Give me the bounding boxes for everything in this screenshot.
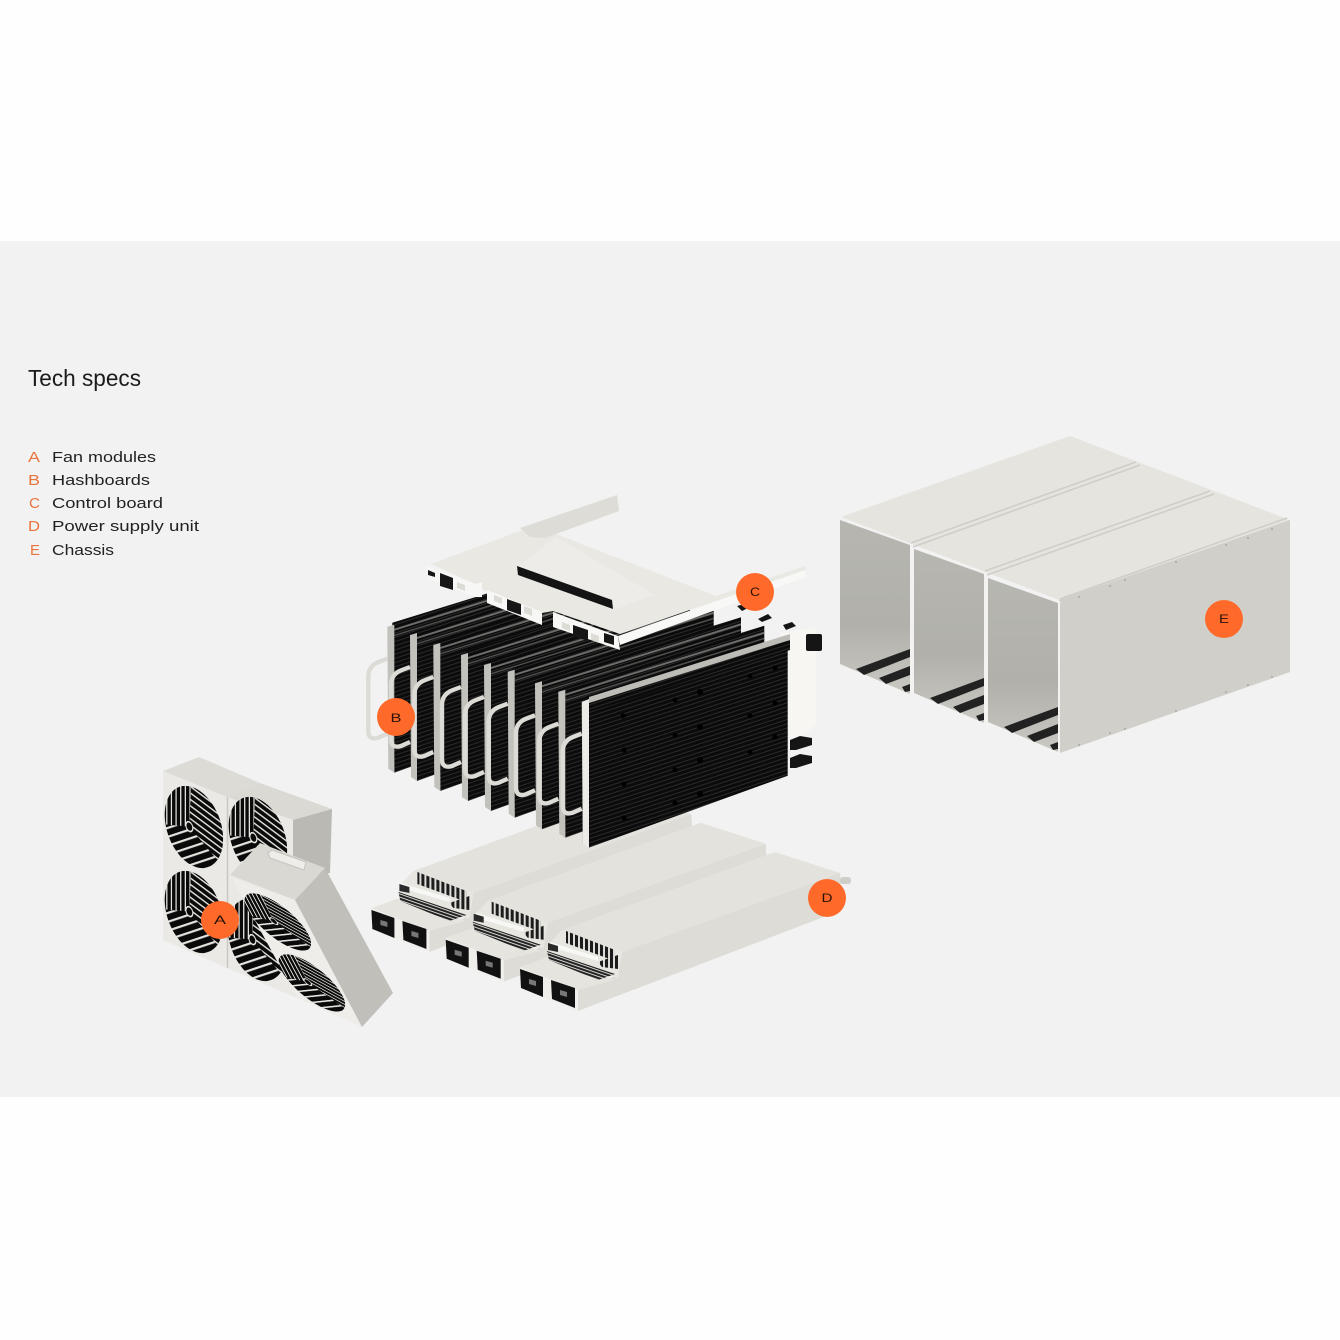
legend item: D Power supply unit (28, 518, 200, 535)
badge B: B (390, 711, 402, 725)
legend item: B Hashboards: Hashboards (52, 472, 150, 489)
badge D: D (822, 891, 833, 905)
rear plate (780, 628, 816, 745)
control board front 3 (553, 612, 620, 650)
tilted module top (230, 843, 325, 900)
right fan module side (293, 809, 332, 880)
control board rail side (618, 570, 806, 645)
port labels (457, 582, 599, 643)
right fan module top (227, 783, 332, 820)
legend item: A Fan modules: Fan modules (52, 449, 156, 466)
power supply 3 (520, 852, 842, 1011)
fan modules (163, 757, 393, 1027)
badge E: E (1219, 612, 1229, 626)
fan 5 (234, 884, 322, 960)
rear rail (520, 495, 619, 538)
legend (28, 449, 200, 559)
chassis top (841, 436, 1290, 600)
title: Tech specs (28, 365, 141, 391)
legend item: C Control board: Control board (52, 495, 163, 512)
left fan module top (163, 757, 260, 797)
hashboards (368, 561, 822, 848)
board 7 (516, 617, 741, 829)
badge C: C (750, 585, 760, 599)
legend item: B Hashboards: B (28, 472, 40, 489)
legend item: E Chassis: E (30, 542, 40, 559)
board 8 (539, 626, 764, 838)
control board front 1 (427, 566, 482, 597)
legend item: D Power supply unit: D (28, 518, 40, 535)
board 9 top band (589, 634, 790, 703)
ports (428, 570, 614, 645)
chassis (840, 436, 1290, 753)
mounting holes (620, 666, 778, 820)
chassis bay 3 (988, 578, 1058, 752)
chassis side (1059, 520, 1290, 753)
board 6 (489, 606, 714, 818)
board 3 (414, 579, 639, 791)
legend item: A Fan modules (28, 449, 156, 466)
power supply 2 (446, 823, 768, 982)
board 1 (368, 561, 593, 773)
legend item: E Chassis: Chassis (52, 542, 114, 559)
legend item: B Hashboards (28, 472, 150, 489)
fan 4 (228, 889, 286, 991)
fan 1 (165, 776, 223, 878)
control board top plate (431, 495, 806, 634)
fan 2 (229, 787, 287, 889)
fan faces (163, 771, 297, 998)
chassis side rivets (1078, 528, 1273, 746)
fan 6 (268, 945, 356, 1021)
inner plate (515, 537, 655, 610)
power supply units (371, 793, 851, 1011)
tilted module face (232, 878, 362, 1027)
board 9 strip (582, 699, 589, 848)
chassis ridges (911, 462, 1287, 599)
legend item: C Control board: C (29, 495, 40, 512)
fan 3 (165, 861, 223, 963)
tilted module handle (268, 850, 306, 870)
board 2 (391, 569, 616, 781)
legend item: E Chassis (30, 542, 114, 559)
control board (427, 495, 806, 650)
board 9 (563, 636, 788, 848)
connector bar (517, 566, 613, 609)
rear pin (840, 877, 851, 884)
tilted module side (295, 868, 393, 1027)
control board front 2 (487, 590, 542, 625)
legend item: A Fan modules: A (28, 449, 40, 466)
badge A: A (214, 913, 226, 927)
power supply 1 (371, 793, 693, 952)
chassis bay 1 (840, 520, 910, 694)
rear connectors (737, 603, 822, 768)
chassis front edges (912, 547, 1059, 752)
badge A (201, 901, 239, 939)
badge B (377, 698, 415, 736)
chassis bay 2 (914, 549, 984, 723)
board 4 (442, 589, 667, 801)
background panel (0, 241, 1340, 1097)
board 9 face (589, 640, 790, 712)
badge E (1205, 600, 1243, 638)
board 5 (465, 599, 690, 811)
legend item: D Power supply unit: Power supply unit (52, 518, 200, 535)
badge D (808, 879, 846, 917)
badge C (736, 573, 774, 611)
legend item: C Control board (29, 495, 163, 512)
